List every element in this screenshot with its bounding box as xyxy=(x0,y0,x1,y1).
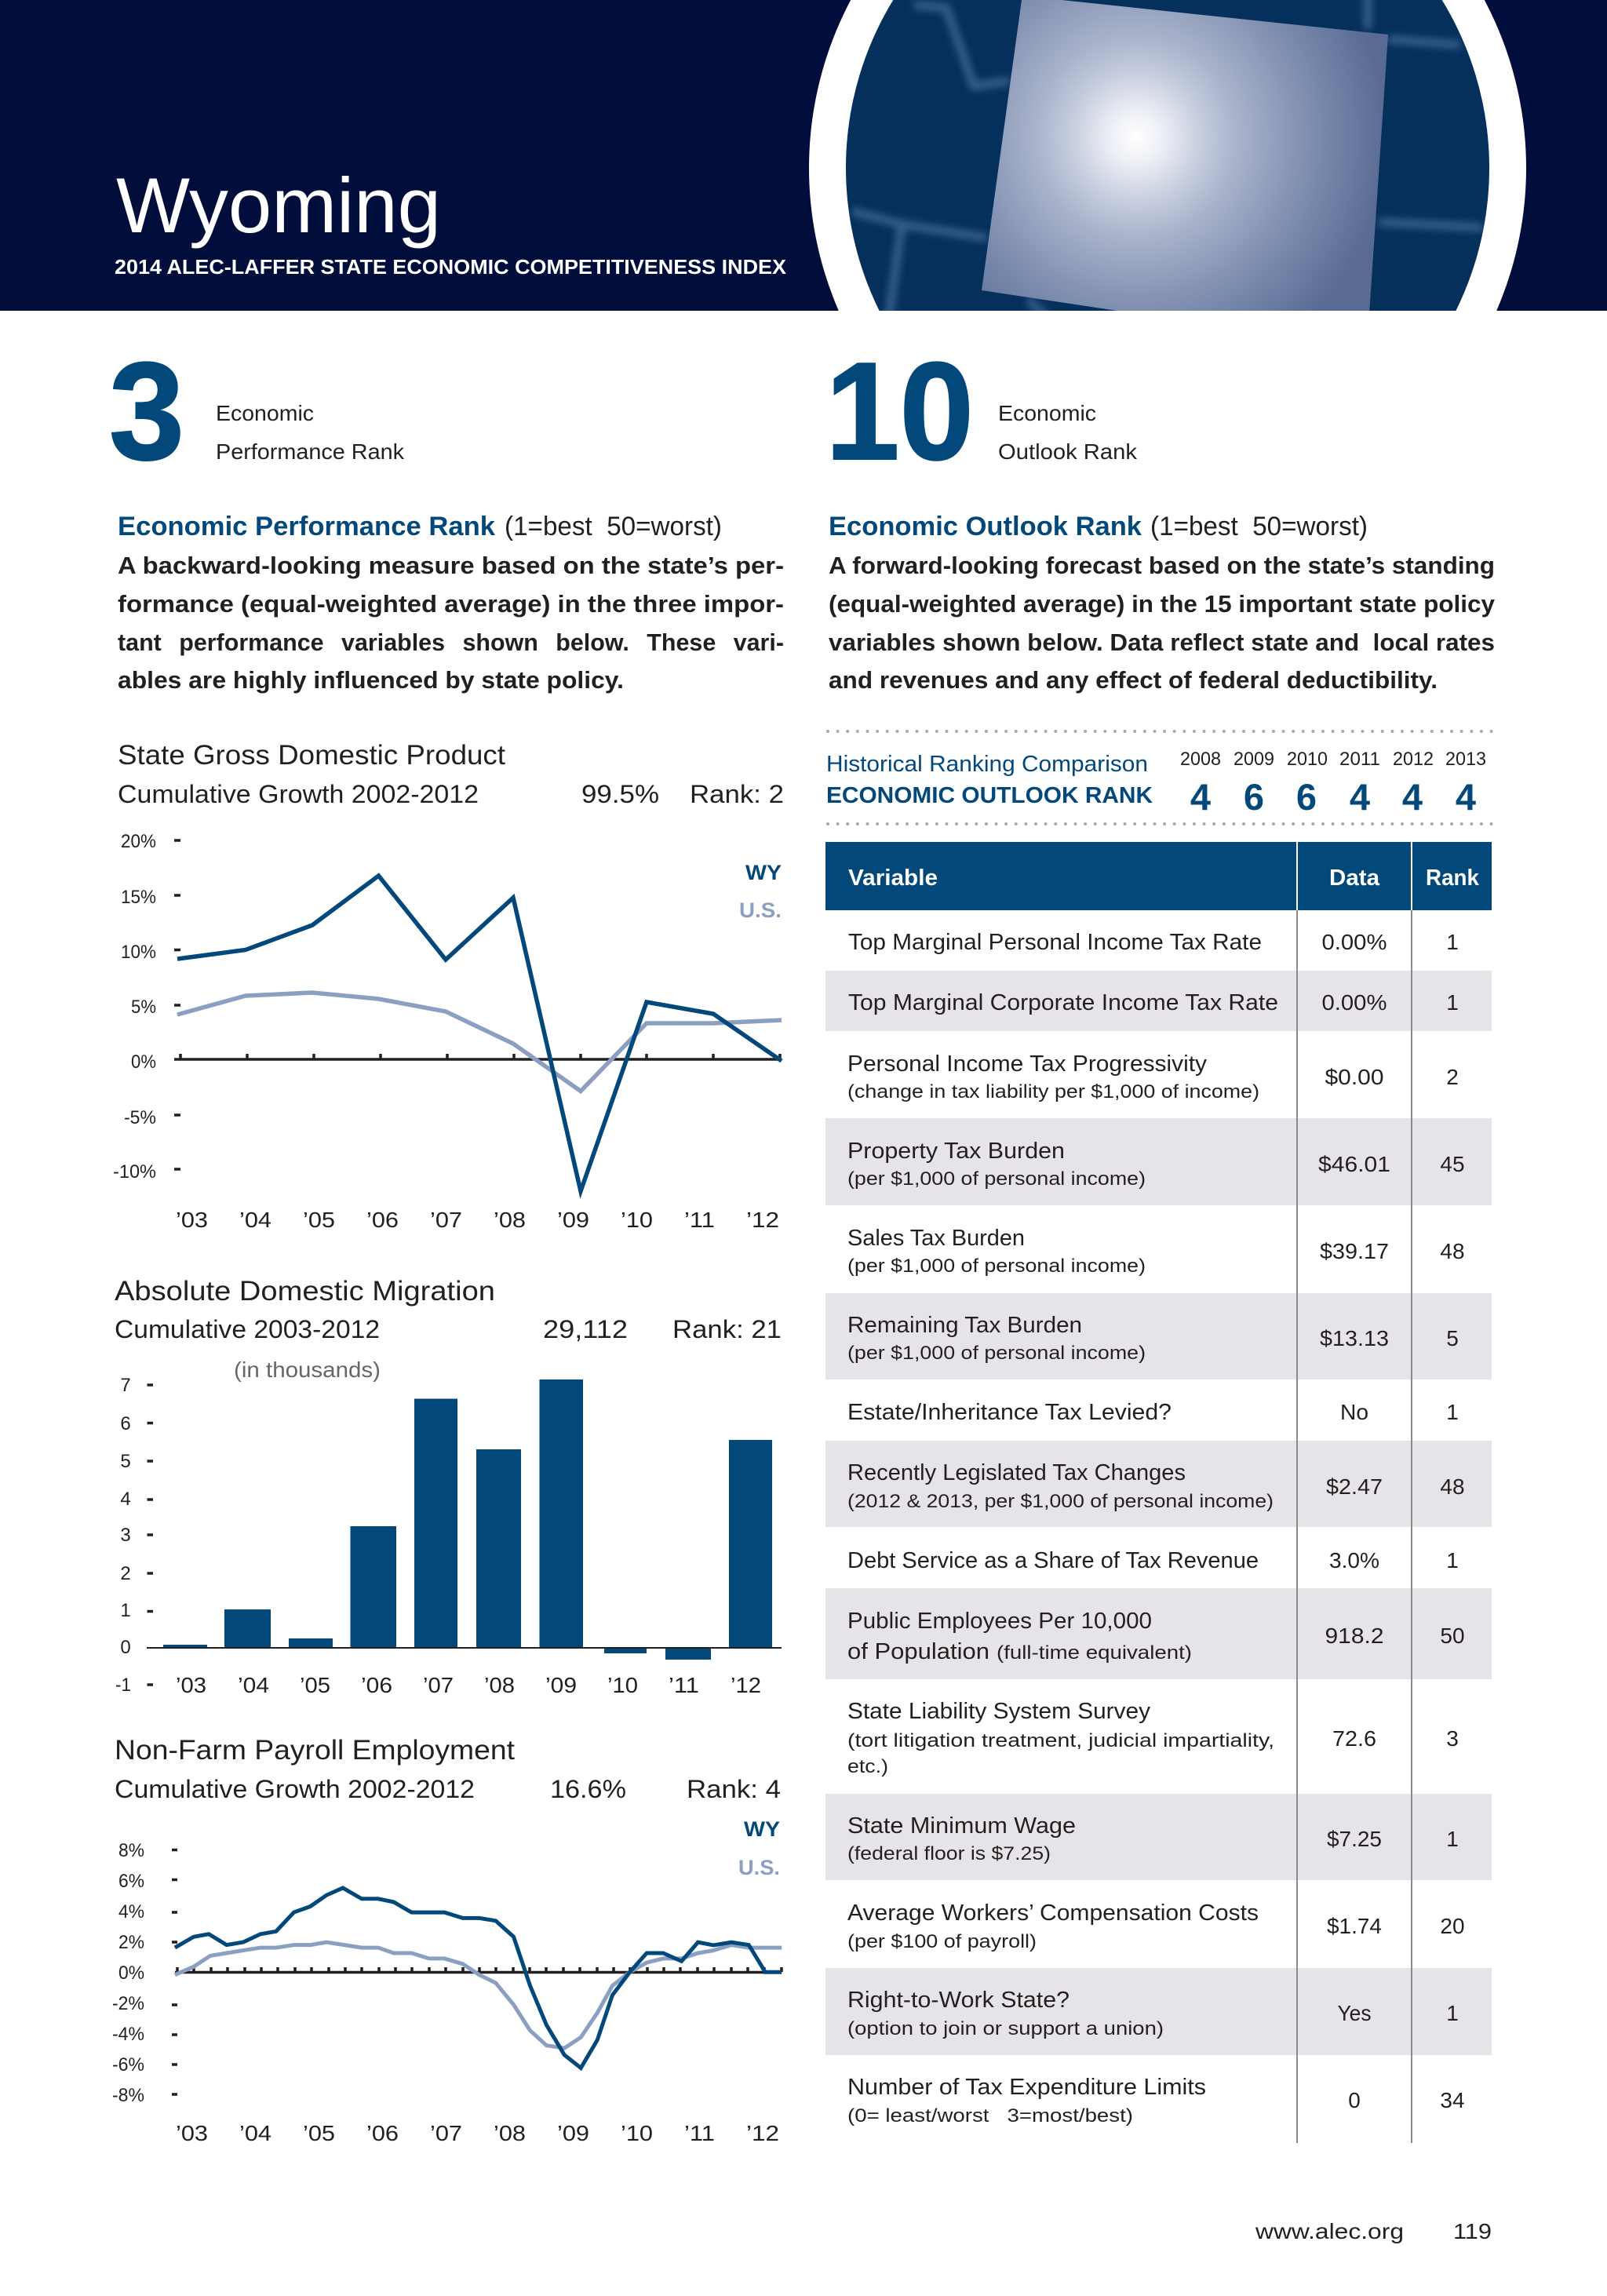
header banner xyxy=(0,0,1607,311)
text block: outlook description: variables shown below. Data reflect state and local rates xyxy=(829,629,1495,656)
text block: outlook description: A forward-looking forecast based on the state’s standing xyxy=(829,552,1495,579)
row: state liability system survey: etc.) xyxy=(847,1756,888,1777)
row: sales tax burden: Sales Tax Burden xyxy=(847,1226,1025,1251)
row: state minimum wage: (federal floor is $7.25) xyxy=(847,1843,1051,1864)
row: top marginal corporate income tax rate xyxy=(848,990,1459,1015)
x axis labels xyxy=(176,2121,779,2145)
y axis labels: 7 xyxy=(120,1375,131,1396)
years row: 2008 xyxy=(1180,749,1221,770)
rank values row: 6 xyxy=(1244,776,1264,818)
panel: state gross domestic product chart xyxy=(113,740,784,1232)
y axis labels: -1 xyxy=(115,1675,131,1696)
row: top marginal corporate income tax rate: Top Marginal Corporate Income Tax Rate xyxy=(848,990,1278,1015)
row: top marginal personal income tax rate xyxy=(848,930,1459,955)
row: average workers' compensation costs xyxy=(847,1901,1465,1952)
x axis labels: ’09 xyxy=(545,1673,577,1697)
text block: performance description: Economic Performance Rank xyxy=(118,512,495,541)
economic outlook rank number: Economic xyxy=(998,401,1096,425)
row: public employees: of Population xyxy=(847,1639,989,1664)
row: sales tax burden: $39.17 xyxy=(1320,1239,1389,1263)
legend: WY xyxy=(745,861,782,884)
chart heading: Rank: 4 xyxy=(687,1775,781,1803)
economic outlook rank number: 10 xyxy=(825,333,974,489)
x axis labels: ’11 xyxy=(684,1208,715,1232)
panel: historical ranking comparison: ECONOMIC OUTLOOK RANK xyxy=(826,783,1153,808)
y axis labels: 2% xyxy=(118,1932,144,1953)
row: estate/inheritance tax: No xyxy=(1340,1400,1368,1424)
row: debt service: Debt Service as a Share of Tax Revenue xyxy=(847,1548,1259,1573)
years row xyxy=(1180,749,1486,770)
legend: U.S. xyxy=(739,898,782,922)
x axis labels: ’12 xyxy=(746,1208,779,1232)
row: sales tax burden: 48 xyxy=(1440,1239,1465,1263)
y axis labels: 0% xyxy=(118,1963,144,1984)
table header: Variable xyxy=(848,866,938,891)
y axis labels: 4 xyxy=(120,1489,131,1510)
row: debt service xyxy=(847,1548,1459,1573)
row: right-to-work state xyxy=(847,1988,1459,2039)
y axis labels: 0% xyxy=(131,1051,156,1073)
row: property tax burden: Property Tax Burden xyxy=(847,1139,1065,1164)
text block: performance description: formance (equal-weighted average) in the three impor- xyxy=(118,591,784,618)
row: right-to-work state: (option to join or support a union) xyxy=(847,2018,1164,2039)
row: public employees xyxy=(847,1609,1465,1664)
text block: outlook description xyxy=(829,512,1495,694)
text block: performance description: tant performance variables shown below. These vari- xyxy=(118,629,784,656)
chart heading: Cumulative 2003-2012 xyxy=(115,1315,380,1343)
row: personal income tax progressivity: Personal Income Tax Progressivity xyxy=(847,1051,1208,1077)
text block: performance description xyxy=(118,512,784,694)
x axis labels: ’06 xyxy=(366,1208,399,1232)
x axis labels: ’10 xyxy=(607,1673,638,1697)
row: state minimum wage: State Minimum Wage xyxy=(847,1813,1076,1839)
panel: policy variables table xyxy=(825,842,1492,2143)
y axis labels xyxy=(115,1375,131,1696)
y axis labels: -2% xyxy=(112,1993,144,2014)
y axis labels xyxy=(112,1840,144,2106)
row: state minimum wage xyxy=(847,1813,1459,1864)
row: top marginal personal income tax rate: 1 xyxy=(1446,930,1459,954)
line: U.S. xyxy=(175,1942,782,2048)
chart heading xyxy=(115,1735,781,1803)
x axis labels: ’05 xyxy=(300,1673,330,1697)
x axis labels: ’03 xyxy=(176,1208,208,1232)
chart heading: 29,112 xyxy=(543,1315,628,1343)
x axis labels: ’07 xyxy=(423,1673,454,1697)
row: personal income tax progressivity: 2 xyxy=(1446,1065,1459,1089)
footer: 119 xyxy=(1453,2219,1492,2243)
row: top marginal personal income tax rate: Top Marginal Personal Income Tax Rate xyxy=(848,930,1262,955)
row: state liability system survey: 72.6 xyxy=(1332,1726,1376,1751)
y axis labels: 3 xyxy=(120,1525,131,1546)
subtitle: 2014 ALEC-LAFFER STATE ECONOMIC COMPETITIVENESS INDEX xyxy=(115,255,787,279)
row: remaining tax burden: Remaining Tax Burden xyxy=(847,1313,1082,1338)
economic performance rank number: 3 xyxy=(109,333,184,489)
chart heading: Rank: 2 xyxy=(690,780,784,808)
x axis labels: ’03 xyxy=(176,1673,206,1697)
row: property tax burden xyxy=(847,1139,1465,1190)
title: Wyoming xyxy=(116,162,441,249)
row: public employees: 50 xyxy=(1440,1624,1465,1648)
row: estate/inheritance tax: Estate/Inheritance Tax Levied? xyxy=(847,1400,1172,1425)
y axis labels: -5% xyxy=(124,1107,156,1128)
panel: absolute domestic migration chart xyxy=(115,1276,782,1697)
years row: 2009 xyxy=(1233,749,1274,770)
x axis labels xyxy=(176,1673,761,1697)
chart heading: Cumulative Growth 2002-2012 xyxy=(115,1775,475,1803)
row: debt service: 3.0% xyxy=(1329,1548,1379,1573)
x axis labels: ’05 xyxy=(303,2121,335,2145)
economic outlook rank number: Outlook Rank xyxy=(998,439,1138,464)
x axis labels: ’10 xyxy=(621,2121,653,2145)
chart heading xyxy=(115,1276,782,1382)
line: WY xyxy=(175,1888,782,2068)
rank values row: 4 xyxy=(1190,776,1211,818)
panel: historical ranking comparison xyxy=(826,731,1493,824)
rank values row: 6 xyxy=(1296,776,1317,818)
row: estate/inheritance tax: 1 xyxy=(1446,1400,1459,1424)
x axis labels: ’11 xyxy=(669,1673,699,1697)
panel: historical ranking comparison: Historical Ranking Comparison xyxy=(826,752,1148,777)
years row: 2010 xyxy=(1287,749,1328,770)
y axis labels: -8% xyxy=(112,2085,144,2106)
legend xyxy=(739,861,782,922)
economic outlook rank number xyxy=(825,333,1138,489)
rank values row: 4 xyxy=(1402,776,1423,818)
row: number of tax expenditure limits: (0= least/worst 3=most/best) xyxy=(847,2105,1133,2127)
chart heading: Non-Farm Payroll Employment xyxy=(115,1735,515,1766)
row: public employees: 918.2 xyxy=(1325,1624,1384,1648)
row: recently legislated tax changes: 48 xyxy=(1440,1474,1465,1499)
table header: Data xyxy=(1329,866,1380,891)
x axis labels: ’07 xyxy=(430,2121,462,2145)
economic performance rank number xyxy=(109,333,405,489)
icon: Wyoming state shape xyxy=(982,0,1388,314)
years row: 2011 xyxy=(1339,749,1380,770)
table header: Rank xyxy=(1426,866,1480,891)
y axis labels: 1 xyxy=(120,1600,131,1621)
y axis labels: 6 xyxy=(120,1413,131,1434)
row: number of tax expenditure limits: 34 xyxy=(1440,2088,1465,2112)
x axis labels: ’06 xyxy=(361,1673,392,1697)
y axis labels: 8% xyxy=(118,1840,144,1861)
y axis labels: -10% xyxy=(113,1161,156,1183)
text block: outlook description: and revenues and any effect of federal deductibility. xyxy=(829,667,1438,694)
row: remaining tax burden: $13.13 xyxy=(1320,1326,1389,1350)
x axis labels: ’04 xyxy=(238,1673,269,1697)
row: right-to-work state: Right-to-Work State? xyxy=(847,1988,1070,2013)
row: property tax burden: 45 xyxy=(1440,1152,1465,1176)
row: state liability system survey: (tort litigation treatment, judicial impartiality, xyxy=(847,1730,1274,1751)
y axis labels: 15% xyxy=(121,887,156,908)
rank values row: 4 xyxy=(1350,776,1370,818)
row: estate/inheritance tax xyxy=(847,1400,1459,1425)
row: personal income tax progressivity: $0.00 xyxy=(1325,1065,1384,1089)
x axis labels: ’12 xyxy=(731,1673,761,1697)
chart heading xyxy=(118,740,784,808)
text block: performance description: A backward-looking measure based on the state’s per- xyxy=(118,552,784,579)
line: U.S. xyxy=(177,993,782,1091)
row: recently legislated tax changes: $2.47 xyxy=(1326,1474,1383,1499)
chart heading: 16.6% xyxy=(550,1775,626,1803)
x axis labels: ’08 xyxy=(494,2121,526,2145)
row: recently legislated tax changes: (2012 & 2013, per $1,000 of personal income) xyxy=(847,1491,1274,1512)
x axis labels: ’07 xyxy=(430,1208,462,1232)
x axis labels: ’10 xyxy=(621,1208,653,1232)
table header xyxy=(825,842,1492,910)
economic performance rank number: Performance Rank xyxy=(216,439,405,464)
row: state minimum wage: 1 xyxy=(1446,1827,1459,1851)
row: remaining tax burden: 5 xyxy=(1446,1326,1459,1350)
chart heading: Rank: 21 xyxy=(672,1315,782,1343)
chart heading: State Gross Domestic Product xyxy=(118,740,505,771)
row: public employees: Public Employees Per 10,000 xyxy=(847,1609,1152,1634)
years row: 2013 xyxy=(1445,749,1486,770)
text block: outlook description: (equal-weighted average) in the 15 important state policy xyxy=(829,591,1495,618)
row: state liability system survey: 3 xyxy=(1446,1726,1459,1751)
y axis labels: 5 xyxy=(120,1451,131,1472)
x axis labels: ’09 xyxy=(557,1208,589,1232)
x axis labels: ’11 xyxy=(684,2121,715,2145)
row: average workers' compensation costs: $1.74 xyxy=(1327,1914,1382,1938)
chart heading: Cumulative Growth 2002-2012 xyxy=(118,780,479,808)
x axis labels: ’08 xyxy=(494,1208,526,1232)
row: right-to-work state: Yes xyxy=(1337,2001,1372,2025)
row: top marginal personal income tax rate: 0.00% xyxy=(1321,930,1387,954)
text block: outlook description: Economic Outlook Rank xyxy=(829,512,1142,541)
row: right-to-work state: 1 xyxy=(1446,2001,1459,2025)
row: recently legislated tax changes: Recently Legislated Tax Changes xyxy=(847,1460,1186,1485)
y axis labels: 4% xyxy=(118,1901,144,1922)
row: top marginal corporate income tax rate: 1 xyxy=(1446,990,1459,1015)
rank values row xyxy=(1190,776,1476,818)
years row: 2012 xyxy=(1393,749,1434,770)
row: remaining tax burden xyxy=(847,1313,1459,1364)
row: number of tax expenditure limits: 0 xyxy=(1348,2088,1361,2112)
row: state liability system survey: State Liability System Survey xyxy=(847,1699,1151,1724)
x axis labels xyxy=(176,1208,779,1232)
x axis labels: ’04 xyxy=(239,2121,271,2145)
row backgrounds xyxy=(825,971,1492,2055)
y axis labels: -4% xyxy=(112,2024,144,2045)
row: public employees: (full-time equivalent) xyxy=(997,1642,1192,1664)
y axis labels: 0 xyxy=(120,1637,131,1658)
text block: outlook description: (1=best 50=worst) xyxy=(1150,512,1368,541)
x axis labels: ’06 xyxy=(366,2121,399,2145)
x axis labels: ’03 xyxy=(176,2121,208,2145)
text block: performance description: ables are highly influenced by state policy. xyxy=(118,667,624,694)
row: average workers' compensation costs: (per $100 of payroll) xyxy=(847,1931,1037,1952)
row: property tax burden: $46.01 xyxy=(1318,1152,1390,1176)
row: personal income tax progressivity: (change in tax liability per $1,000 of income) xyxy=(847,1081,1259,1102)
y axis labels: 6% xyxy=(118,1871,144,1892)
y axis labels: 2 xyxy=(120,1563,131,1584)
row: sales tax burden: (per $1,000 of personal income) xyxy=(847,1256,1146,1277)
state map medallion xyxy=(809,0,1526,311)
economic performance rank number: Economic xyxy=(216,401,314,425)
y axis labels: -6% xyxy=(112,2054,144,2076)
x axis labels: ’05 xyxy=(303,1208,335,1232)
line: WY xyxy=(177,876,782,1191)
rank values row: 4 xyxy=(1456,776,1476,818)
text block: performance description: (1=best 50=worst) xyxy=(505,512,722,541)
row: number of tax expenditure limits xyxy=(847,2075,1465,2127)
x axis labels: ’09 xyxy=(557,2121,589,2145)
bars xyxy=(163,1379,772,1660)
x axis labels: ’08 xyxy=(484,1673,515,1697)
x axis labels: ’12 xyxy=(746,2121,779,2145)
chart heading: (in thousands) xyxy=(234,1358,381,1382)
chart heading: 99.5% xyxy=(581,780,659,808)
legend: U.S. xyxy=(738,1856,780,1879)
row: remaining tax burden: (per $1,000 of personal income) xyxy=(847,1343,1146,1364)
y axis labels: 5% xyxy=(131,997,156,1018)
row: personal income tax progressivity xyxy=(847,1051,1459,1102)
footer xyxy=(1255,2219,1492,2243)
panel: non-farm payroll employment chart xyxy=(112,1735,782,2145)
legend: WY xyxy=(744,1817,780,1841)
y axis labels xyxy=(113,831,156,1183)
row: average workers' compensation costs: 20 xyxy=(1440,1914,1465,1938)
row: number of tax expenditure limits: Number of Tax Expenditure Limits xyxy=(847,2075,1206,2100)
row: recently legislated tax changes xyxy=(847,1460,1465,1512)
legend xyxy=(738,1817,780,1879)
chart heading: Absolute Domestic Migration xyxy=(115,1276,495,1307)
row: property tax burden: (per $1,000 of personal income) xyxy=(847,1168,1146,1190)
row: top marginal corporate income tax rate: 0.00% xyxy=(1321,990,1387,1015)
footer: www.alec.org xyxy=(1255,2219,1404,2243)
row: debt service: 1 xyxy=(1446,1548,1459,1573)
row: sales tax burden xyxy=(847,1226,1465,1277)
row: average workers' compensation costs: Average Workers’ Compensation Costs xyxy=(847,1901,1259,1926)
row: state minimum wage: $7.25 xyxy=(1327,1827,1382,1851)
row: state liability system survey xyxy=(847,1699,1459,1777)
y axis labels: 20% xyxy=(121,831,156,852)
x axis labels: ’04 xyxy=(239,1208,271,1232)
y axis labels: 10% xyxy=(121,942,156,963)
